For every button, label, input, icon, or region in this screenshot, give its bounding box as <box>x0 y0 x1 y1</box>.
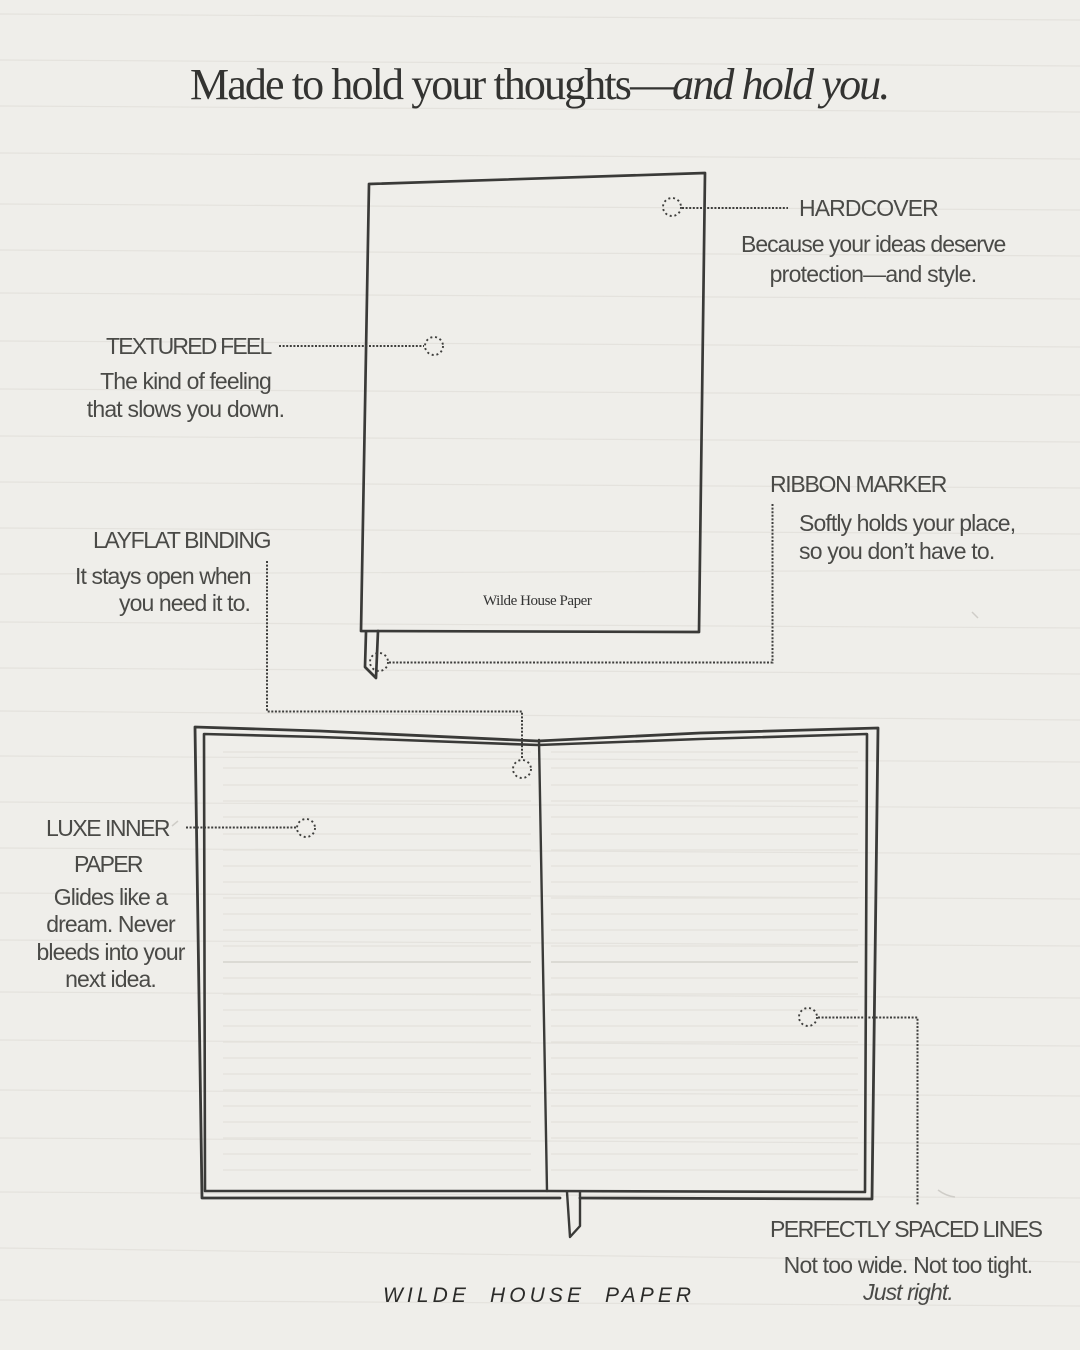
callout: layflat binding: It stays open when <box>75 563 251 589</box>
cover brand text: Wilde House Paper <box>483 593 591 609</box>
callout: perfectly spaced lines <box>770 1216 1042 1305</box>
book cover: closed notebook <box>361 173 705 678</box>
connector: textured feel <box>279 337 443 355</box>
callout: hardcover <box>741 195 1006 287</box>
inner page lines <box>223 752 858 1170</box>
callout: perfectly spaced lines: Not too wide. Not too tight. <box>784 1252 1032 1278</box>
callout: perfectly spaced lines: Just right. <box>863 1279 953 1305</box>
callout: layflat binding: you need it to. <box>119 590 250 616</box>
icon: ribbon marker on cover <box>365 631 378 678</box>
callout: luxe inner paper: PAPER <box>74 851 142 877</box>
callout: textured feel: that slows you down. <box>87 396 284 422</box>
icon: ribbon marker on open book <box>567 1192 580 1237</box>
callout: ribbon marker: Softly holds your place, <box>799 510 1015 536</box>
connector: hardcover <box>663 198 788 216</box>
connector: luxe inner paper <box>186 819 315 837</box>
callout: textured feel <box>87 333 284 422</box>
callout: perfectly spaced lines: PERFECTLY SPACED LINES <box>770 1216 1041 1242</box>
handwritten brand logo: WILDE HOUSE PAPER <box>383 1284 695 1307</box>
callout: ribbon marker <box>770 471 1015 564</box>
callout: luxe inner paper: next idea. <box>65 966 156 992</box>
callout: hardcover: protection—and style. <box>770 261 976 287</box>
open notebook <box>195 727 878 1237</box>
connector: ribbon marker <box>370 503 772 671</box>
callout: layflat binding: LAYFLAT BINDING <box>93 527 270 553</box>
title: Made to hold your thoughts—and hold you. <box>190 60 888 109</box>
callout: luxe inner paper: Glides like a <box>54 884 167 910</box>
callout: luxe inner paper: bleeds into your <box>36 939 184 965</box>
callout: hardcover: HARDCOVER <box>799 195 938 221</box>
callout: luxe inner paper: dream. Never <box>46 911 175 937</box>
callout: ribbon marker: RIBBON MARKER <box>770 471 946 497</box>
callout: textured feel: TEXTURED FEEL <box>106 333 270 359</box>
stray paper marks <box>172 612 978 1197</box>
callout: luxe inner paper <box>36 815 186 992</box>
callout: hardcover: Because your ideas deserve <box>741 231 1005 257</box>
connector: layflat binding <box>267 561 531 778</box>
callout: ribbon marker: so you don’t have to. <box>799 538 994 564</box>
connector: perfectly spaced lines <box>799 1008 918 1205</box>
callout: textured feel: The kind of feeling <box>100 368 271 394</box>
callout: layflat binding <box>75 527 270 616</box>
callout: luxe inner paper: LUXE INNER <box>46 815 169 841</box>
